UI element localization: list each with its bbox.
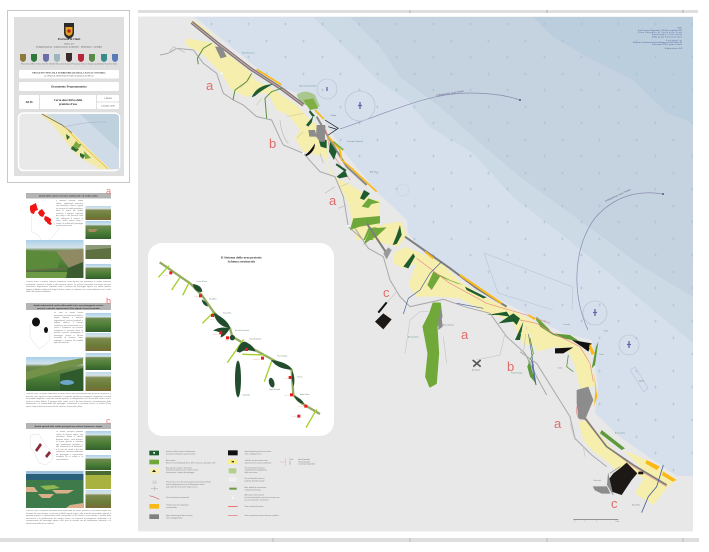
top right notes: Piano Regionale di Tutela delle Coste [638, 31, 682, 34]
panel: schema: Torino [225, 340, 229, 342]
legend labels: Percorsi fluviali di interesse [245, 477, 265, 480]
schema labels: Lecceta di Torino [197, 280, 207, 283]
letter labels north: a [206, 78, 214, 93]
schema labels: Lago Sinello [242, 395, 250, 397]
coast segment: centre [355, 222, 550, 395]
legend [149, 450, 315, 519]
legend labels: Attrezzature extracostruite [245, 494, 264, 497]
icon: province crest [64, 23, 74, 39]
coast segment: centre: Aeroporto [472, 368, 480, 371]
coast segment: centre: Area protetta [408, 335, 420, 338]
legend distance marks [280, 458, 286, 466]
coast labels: San Vito [370, 171, 377, 174]
sheet info table: 1:60.000 [104, 98, 113, 100]
panel: schema: Ortona [194, 295, 199, 298]
section b: text below photo: Pratiche d'uso: Gli ambiti tradizionali di media collina sono caratterizzati dalla presenza di percorsi e macchie, ulivi, vigneti e terreni seminativi. Le pratiche includono passeggiate, cicloturismo, raccolta dei prodotti stagionali e visite alle aziende agricole, in collegamento con i servizi della costa e con le strutture ricettive diffuse. Il recupero delle strade rurali e dei fossi favorisce il mantenimento della biodiversità e la riconoscibilità del paesaggio, sostenendo le economie locali e le attività all'aria aperta lungo le direttrici trasversali che uniscono il mare alla collina. [26, 393, 111, 408]
legend labels: 1.500 [289, 459, 293, 461]
schema labels: Bosco di Don Venanzio [235, 330, 249, 332]
municipal crests row [20, 53, 118, 66]
letter labels centre: b [507, 359, 514, 374]
legend labels: pedonale di fondo e fluviali [245, 480, 265, 482]
scale bar: 0 [575, 521, 576, 523]
icon: anchor buoys [317, 79, 639, 355]
legend swatches right [228, 450, 238, 515]
schema branches [158, 266, 317, 428]
panel: schema: San Vito [210, 317, 215, 320]
scale bar: 5 km [616, 521, 620, 523]
letter labels south: c [611, 496, 618, 511]
legend labels: Città e villaggio interno [245, 452, 261, 455]
panel: schema: Francavilla [162, 275, 169, 277]
top right notes: Sistema di riferimento Gauss-Boaga fuso Est, Roma 40 [633, 41, 682, 44]
section c: letter: c [106, 416, 111, 426]
top right notes [633, 26, 683, 50]
coast segment: south [520, 320, 677, 523]
sheet info table: pratiche d'uso [59, 102, 78, 106]
section a: main photo [26, 240, 84, 278]
legend labels: Sistema collinare costiero di interazione [166, 450, 195, 453]
panel: schema: Vasto [285, 376, 288, 379]
schema labels: Lago di Serranella [269, 388, 280, 391]
coast segment: south: Area marina [615, 431, 626, 434]
schema labels: Punta Aderci [209, 297, 217, 300]
letter labels south: a [554, 416, 562, 431]
section b: main photo [26, 357, 84, 391]
panel: schema: Casalbordino [253, 358, 260, 360]
sheet info table: Carta descrittiva delle [54, 98, 83, 102]
letter labels centre: a [461, 327, 469, 342]
legend labels [166, 450, 315, 519]
legend labels: Rete comunale ferroviaria, dismessa e gallerie [245, 514, 279, 517]
sheet info table [19, 95, 119, 109]
top right notes: Elaborazione Provincia di Chieti [652, 35, 683, 38]
top right notes: Elaborazione GIS [665, 47, 683, 50]
icon: airstrip [473, 360, 481, 367]
letter labels south [554, 416, 618, 511]
coast segment: south: San Salvo [632, 505, 640, 507]
coast segment: north [160, 20, 380, 240]
section b: heading: percorsi e macchie vegetazionali, ulivi, vigneti e terreni seminativi [37, 307, 100, 310]
cover heading [36, 38, 103, 48]
coast segment: centre: Aviosuperficie [443, 323, 454, 326]
legend labels: Città e villaggio diretto [166, 516, 182, 519]
legend labels: Aree protette [166, 459, 176, 462]
section c: heading [26, 423, 111, 429]
sheet info table: settembre 2010 [101, 106, 116, 108]
top right notes: Sopralluoghi e rilievi diretti [652, 33, 683, 36]
section a: text below photo: Pratiche d'uso: Il sistema collinare comprende ambiti agricoli con prevalenza di colture estensive tradizionali, connessi ai borghi e alle masserie sparse. Le pratiche riguardano escursioni, percorsi naturalistici, degustazioni, ospitalità rurale e fruizione del paesaggio agrario con attività sportive leggere e didattica ambientale lungo la fascia costiera, in relazione con i servizi balneari e con i centri storici del sistema insediativo. [26, 281, 111, 293]
bottom strip [0, 538, 699, 542]
arrow: link to Tremiti south [577, 188, 664, 330]
section a: locator map [30, 203, 59, 242]
section c: main photo [26, 471, 84, 508]
scale bar [573, 519, 620, 523]
letter labels centre [383, 285, 514, 374]
project title box: art. 10-bis L.R. 18/83; Norme Tecniche di Attuazione del P.T.C.P. [44, 75, 94, 78]
schema labels: Riserva [298, 376, 303, 379]
cover thumbnail map [18, 113, 120, 170]
legend labels: dalla collina per le marinerie lungo la costa [166, 485, 197, 488]
cover heading: Provincia di Chieti [58, 38, 80, 41]
letter labels north: a [329, 193, 337, 208]
scale bar: 1 [585, 521, 586, 523]
coast segment: south: Vasto [558, 366, 562, 369]
legend labels: ambientale demaniale [245, 488, 261, 491]
sheet info table: All 06 [25, 101, 33, 104]
coast labels [242, 51, 377, 174]
coast labels: Ortona [331, 114, 337, 117]
municipal crests row: Francavilla al Mare Ortona San Vito Chietino Rocca San Giovanni Fossacesia Torino di Sangro Casalbordino Vasto San Salvo [21, 62, 117, 66]
legend labels: rurali di collegamento con vie di collegamento locale [166, 483, 204, 486]
section b: locator map [30, 318, 50, 349]
legend labels: Aree agricole costiere e interstiziali [166, 466, 192, 469]
coast segment: south: Secca [639, 381, 645, 383]
legend labels: Aree stabilite di riconversione [245, 486, 266, 489]
document type box [19, 82, 119, 91]
coast labels: Costa dei Trabocchi [347, 140, 364, 143]
coast segment: south: Lecceta [563, 323, 571, 326]
schema labels [197, 280, 310, 397]
document type box: Documento Programmatico [51, 84, 87, 88]
legend labels: pertinenti ad impianti o aree costiere interne [166, 469, 198, 472]
section a: photo strip [86, 206, 111, 279]
section a: heading [26, 193, 111, 198]
panel: schema: Fossacesia [213, 334, 219, 336]
legend labels: Percorsi fluviali di interesse [245, 466, 265, 469]
schema labels: Foce del Sangro [277, 354, 288, 357]
legend labels: Aree Disponibili [298, 458, 310, 461]
top right notes: Fonti: [678, 26, 683, 30]
panel: schema: Vasto M. [284, 393, 290, 396]
legend labels: percorsi demaniali e loro dintorni [245, 498, 269, 501]
legend labels: Percorsi litoranei non demaniali [166, 496, 190, 499]
section b: heading: Ambiti tradizionali di media collina adatti, fra le aree pianeggianti costiere [34, 304, 104, 307]
project title box [19, 70, 119, 78]
coast segment: south: Zona ind. [594, 480, 602, 482]
legend labels: Tratti di costa non antropizzata [166, 504, 189, 507]
schema title [221, 255, 262, 263]
legend labels: Percorsi di accesso dei servizi agricoli con prevalenza Strade [166, 481, 211, 484]
arrow: link to Tremiti north: Collegamento verso Tremiti [436, 90, 464, 97]
schema title: Schema strutturale [228, 259, 255, 263]
section c: locator map [30, 434, 53, 465]
schema title: Il Sistema delle aree protette [221, 255, 262, 259]
sea [195, 17, 693, 476]
top right notes: Carta Tecnica Regionale 1:25.000 e ortofoto 2007 [638, 29, 682, 32]
sea boundaries [484, 253, 648, 392]
top right notes: Proiezione UTM e quote in metri [652, 43, 683, 46]
legend labels: Aree Disponibili [298, 460, 310, 463]
section c: heading: Ambiti agricoli delle vallate principali con colture di pianura e irrigue [35, 425, 103, 428]
coast segment: south: Porto [604, 330, 608, 333]
letter labels north: b [269, 136, 276, 151]
panel: map [138, 16, 693, 532]
arrow: link to Tremiti north [340, 90, 521, 129]
schema protected areas [193, 284, 304, 404]
project title box: PROGETTO SPECIALE TERRITORIALE DELLA FASCIA COSTIERA [32, 72, 106, 74]
letter labels centre: c [383, 285, 390, 300]
arrow: link to Tremiti south: Collegamento verso Tremiti [604, 188, 632, 203]
cover heading: Programmazione - pianificazione territoriale - Urbanistica - mobilità [36, 46, 103, 48]
schema spine [160, 262, 320, 414]
section a: heading: Ambiti delle colture estensive tradizionali e di media collina [39, 195, 99, 198]
legend labels: non demaniale [166, 507, 177, 509]
legend labels: Spazi urbani lungo la fascia costiera [166, 514, 193, 517]
cover heading: Settore n.9 [64, 44, 74, 46]
coast segment: centre: Fiume Sangro [511, 372, 522, 374]
legend labels: delle aree interne [245, 471, 258, 474]
section b: heading [26, 303, 111, 310]
top strip [138, 10, 698, 13]
legend labels: 50 [289, 461, 291, 463]
section c: photo strip [86, 431, 111, 508]
legend labels: di interazione + impianti di riordinaggio [166, 471, 194, 474]
panel: cover sheet [8, 10, 130, 182]
section a: text beside map: Il territorio collinare ospita colture tradizionali estensive con seminativi, uliveti e vigneti su versanti di media pendenza, dove la trama dei poderi conserva il disegno originario dei campi e dei percorsi rurali che collegano le marine ai centri storici interni lungo i crinali e le vallate del paesaggio costiero abruzzese. [56, 200, 83, 227]
legend labels: tra pratiche ambientali e agroecosistemi [166, 452, 196, 455]
legend labels: Riserve e Parchi Regionali SIC e ZPS ai sensi dir. comunitarie 79/4 [166, 461, 215, 464]
scale bar: 2 [596, 521, 597, 523]
legend labels: di ricovero biocordate, spazi di conversione con [245, 496, 280, 499]
schema nodes [169, 271, 307, 418]
coast labels: Punta Ferruccio [242, 51, 255, 54]
panel: schema [148, 243, 334, 436]
coast labels: Area marina protetta [299, 85, 317, 88]
legend labels: Tratti di costa poco interessante [245, 459, 268, 462]
top right notes: Cartografia: [666, 39, 683, 42]
legend labels: Spazi urbani lungo la fascia costiera [245, 450, 271, 453]
schema labels: Marina di Vasto [300, 393, 310, 396]
section c: text below photo: Pratiche d'uso: Le pianure alluvionali sono interessate da colture intensive e da pratiche legate alla fruizione dei corsi d'acqua, ai percorsi ciclabili lungo gli argini e alla visita dei siti produttivi agricoli. Il progetto propone la valorizzazione delle connessioni tra foci fluviali e aree protette, il riordino delle attrezzature e la qualificazione dei margini urbani, con interventi di mitigazione ambientale e di ricomposizione del paesaggio agrario nelle zone di contatto con gli insediamenti industriali e le infrastrutture della fascia costiera. [26, 510, 111, 524]
schema labels: Area protetta [223, 312, 232, 315]
coast segment: south: Foce [600, 354, 604, 356]
legend swatches left [149, 451, 159, 519]
letter labels north [206, 78, 337, 208]
legend labels: ciclopedonale di collegamento [245, 469, 267, 472]
section b: photo strip [86, 313, 111, 391]
section b: text beside map: Le aree di media collina presentano un mosaico di uliveti e vigneti alternati a macchie vegetazionali, percorsi poderali e laghetti collinari. Il sistema costituisce una connessione tra la costa e l'entroterra con funzioni ecologiche e ricreative, dove le pratiche agricole mantengono il paesaggio storico e offrono occasioni di fruizione lenta, ospitalità e scoperta dei prodotti tipici del territorio. [54, 312, 83, 344]
schema labels: Riserva Acquabella [249, 338, 261, 341]
legend labels: 25 [289, 464, 291, 466]
legend labels: Rete comunale ferroviaria [245, 505, 264, 508]
section b: letter: b [106, 296, 111, 306]
legend labels: connessioni disponibili [298, 464, 315, 466]
panel: schema: Cupello [292, 416, 297, 418]
section c: text beside map: Le vallate principali ospitano colture di pianura irrigue, con seminativi, frutteti e orticole disposte lungo i corsi d'acqua. La trama agricola si relaziona agli insediamenti produttivi e alle infrastrutture di fondovalle, e la rete dei canali e dei filari costituisce elemento ordinatore del paesaggio e connessione ecologica tra la collina e la costa adriatica. [56, 431, 83, 460]
section a: letter: a [106, 186, 111, 196]
panel: schema: San Salvo [298, 406, 304, 408]
legend labels: attraverso per il restauro ambientale [245, 461, 271, 464]
